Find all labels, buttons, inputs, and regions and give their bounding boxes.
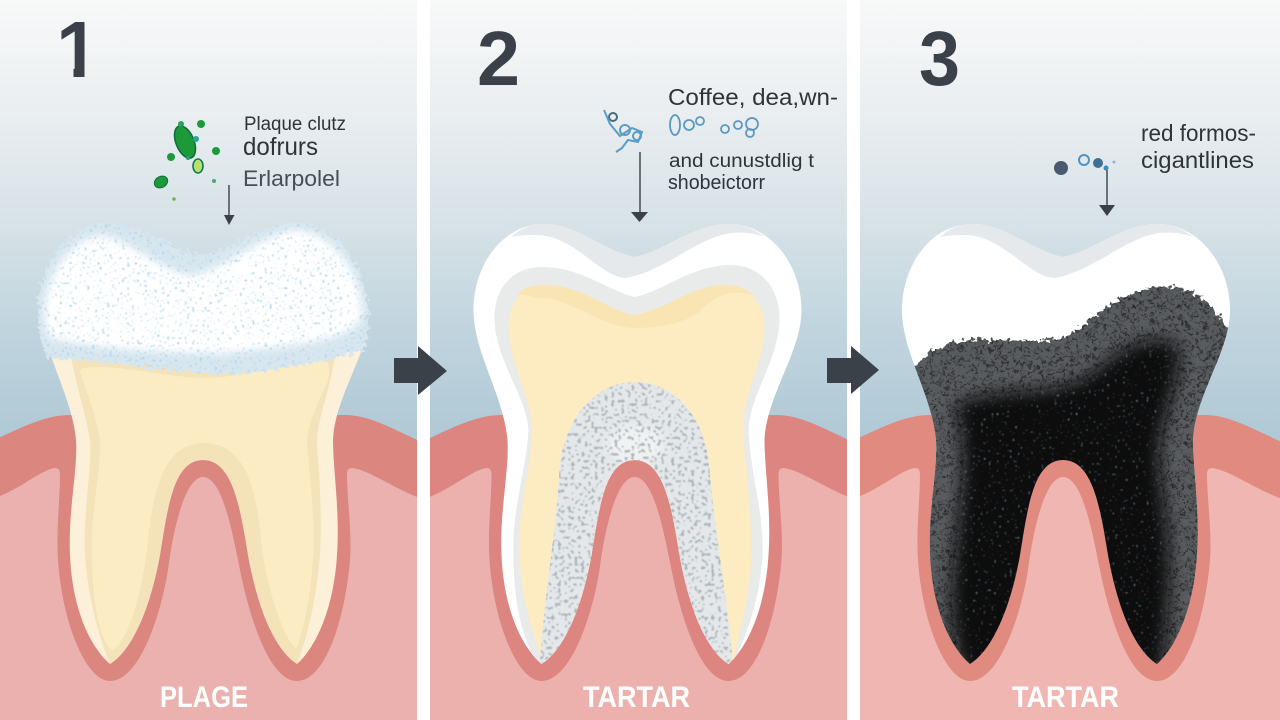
tooth 3 crown — [902, 224, 1230, 664]
stage label: plage: PLAGE — [160, 681, 248, 714]
arrow: stage 1 to 2 — [394, 346, 447, 395]
pointer arrow 1 — [224, 185, 234, 225]
pointer arrow 3 — [1099, 170, 1115, 216]
tartar caption: red formos- — [1141, 120, 1256, 146]
stage label: tartar: TARTAR — [583, 681, 690, 714]
stain caption: and cunustdlig t — [669, 151, 815, 172]
black tartar deposit — [914, 284, 1228, 664]
panel 2: stain — [422, 0, 862, 720]
panel 2 background — [430, 0, 847, 445]
number 3: 3 — [919, 16, 960, 102]
tartar deposit in roots — [540, 382, 734, 670]
number 2: 2 — [477, 16, 520, 102]
panel 3 background — [860, 0, 1280, 445]
small particle icons — [1054, 155, 1116, 175]
pointer arrow 2 — [631, 152, 648, 222]
plaque caption: dofrurs — [243, 133, 318, 161]
stain caption — [668, 84, 838, 194]
panel 1 gums — [0, 415, 430, 720]
stain caption: shobeictorr — [668, 172, 765, 194]
stain caption: Coffee, dea,wn- — [668, 84, 838, 110]
tartar caption: cigantlines — [1141, 147, 1254, 173]
stage label: tartar: TARTAR — [1012, 681, 1119, 714]
panel 1 background — [0, 0, 417, 445]
panel 2 gums — [422, 415, 862, 720]
arrow: stage 2 to 3 — [827, 346, 879, 394]
tartar caption — [1141, 120, 1256, 173]
plaque caption: Erlarpolel — [243, 166, 340, 191]
tooth 1 with dentin — [52, 350, 361, 664]
tooth 2 enamel and dentin — [474, 224, 802, 670]
plaque layer on crown — [38, 223, 368, 375]
panel 3 gums — [850, 415, 1280, 720]
plaque caption: Plaque clutz — [244, 114, 346, 135]
stain molecule cluster icon — [604, 110, 642, 152]
number 1: 1 — [56, 5, 100, 94]
plaque bacteria cluster icon — [152, 120, 220, 201]
panel 3: advanced tartar — [850, 0, 1280, 720]
panel 1: plaque — [0, 0, 430, 720]
plaque caption — [243, 114, 346, 191]
